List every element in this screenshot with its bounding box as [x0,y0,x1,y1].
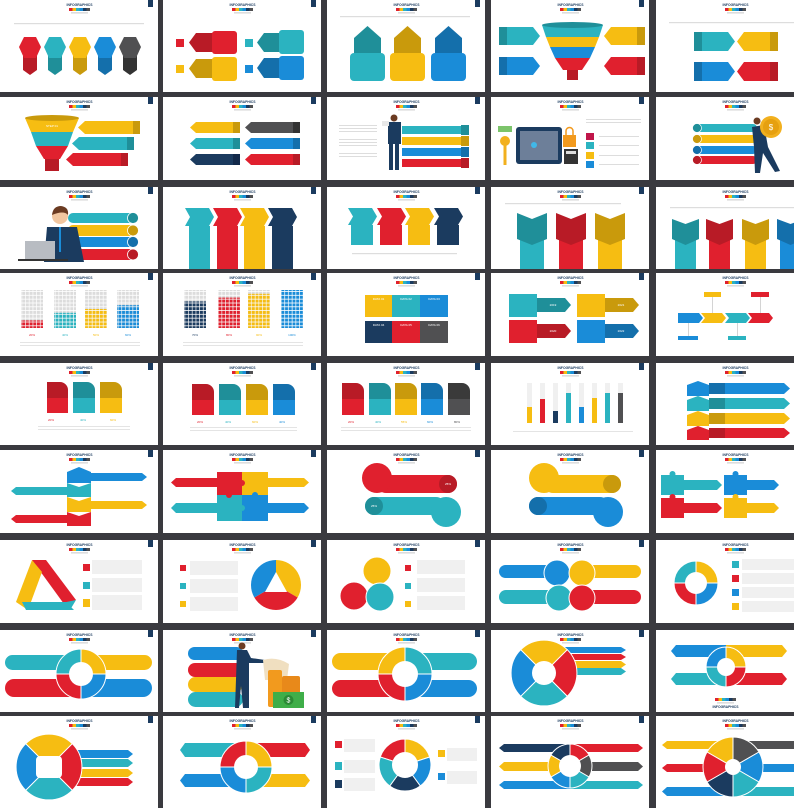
slide 22: four tabs [163,363,321,445]
slide 23: five tabs: 40% [375,420,381,424]
slide 44: six-part ring with arrows [491,716,649,808]
slide 5: four arrows [656,0,794,92]
slide 32: circle thirds [163,540,321,623]
slide 25: stacked arrows [656,363,794,445]
slide 17: filled grids [163,273,321,356]
slide 45: six-part swirl [656,716,794,808]
slide 38: ring with four arrows [327,630,485,712]
slide 21: three tabs: 60% [110,418,116,422]
slide 18: data table: DATA 02 [400,297,412,301]
slide 18: data table: DATA 06 [428,323,440,327]
slide 10: man with coin: $ [769,123,774,132]
slide 40: circular arrows, header at bottom [656,630,794,712]
slide 19: year boxes: 2019 [550,303,557,307]
slide 6: funnel steps: STEP 01 [46,124,58,128]
slide 24: bar chart [491,363,649,445]
slide 19: year boxes: 2021 [618,303,625,307]
slide 17: filled grids: 70% [192,333,198,337]
slide 22: four tabs: 60% [252,420,258,424]
slide 20: timeline [656,273,794,356]
slide 30: puzzle pieces arrows [656,450,794,533]
slide 37: businessman with money [163,630,321,712]
slide 19: year boxes: 2020 [550,329,557,333]
slide 14: three banners [491,187,649,269]
slide 8: man with bars [327,97,485,180]
slide 7: two columns of arrows [163,97,321,180]
slide 37: businessman with money: $ [287,698,291,704]
slide 23: five tabs: 60% [427,420,433,424]
slide 21: three tabs [0,363,158,445]
slide 18: data table: DATA 03 [428,297,440,301]
slide 42: puzzle ring with arrows [163,716,321,808]
slide 34: four circles with bars [491,540,649,623]
slide 3: house boxes [327,0,485,92]
slide 10: man with coin [656,97,794,180]
slide 19: year boxes: 2022 [618,329,625,333]
slide 29: circle bars yellow blue [491,450,649,533]
slide 23: five tabs: 55% [401,420,407,424]
slide 16: square grids percentages [0,273,158,356]
slide 18: data table: DATA 05 [400,323,412,327]
slide 28: circle bars red teal: 25% [371,504,377,508]
slide 36: ring with side bars [0,630,158,712]
slide 9: safe and security [491,97,649,180]
slide 23: five tabs [327,363,485,445]
slide 40: circular arrows, header at bottom: INFOGRAPHICS [712,705,739,709]
slide 23: five tabs: 80% [454,420,460,424]
slide 18: data table: DATA 01 [373,297,385,301]
slide 16: square grids percentages: 20% [29,333,35,337]
slide 28: circle bars red teal [327,450,485,533]
slide 26: vertical stack with arrows [0,450,158,533]
slide 17: filled grids: 100% [288,333,296,337]
slide 11: man at laptop [0,187,158,269]
slide 22: four tabs: 20% [197,420,203,424]
slide 21: three tabs: 40% [80,418,86,422]
slide 12: chevron columns [163,187,321,269]
slide 41: big ring with arrows [0,716,158,808]
slide 31: triangle cycle [0,540,158,623]
slide 16: square grids percentages: 40% [62,333,68,337]
slide 17: filled grids: 80% [226,333,232,337]
slide 27: puzzle with arrows [163,450,321,533]
slide 19: year boxes [491,273,649,356]
slide 18: data table: DATA 04 [373,323,385,327]
slide 16: square grids percentages: 60% [125,333,131,337]
slide 28: circle bars red teal: 25% [445,482,451,486]
slide 16: square grids percentages: 50% [93,333,99,337]
slide 21: three tabs: 20% [48,418,54,422]
slide 1: hexagon steps [0,0,158,92]
slide 33: three circles [327,540,485,623]
slide 35: ring four parts [656,540,794,623]
slide 39: swirl circle with arrows [491,630,649,712]
slide 22: four tabs: 40% [279,420,285,424]
slide 4: funnel with arrows [491,0,649,92]
slide 18: data table [327,273,485,356]
slide 17: filled grids: 90% [256,333,262,337]
slide 13: chevrons with boxes [327,187,485,269]
slide 43: five-part cycle [327,716,485,808]
slide 22: four tabs: 40% [225,420,231,424]
slide 15: four banners [656,187,794,269]
slide 6: funnel steps [0,97,158,180]
slide 23: five tabs: 20% [348,420,354,424]
slide 2: arrow boxes [163,0,321,92]
